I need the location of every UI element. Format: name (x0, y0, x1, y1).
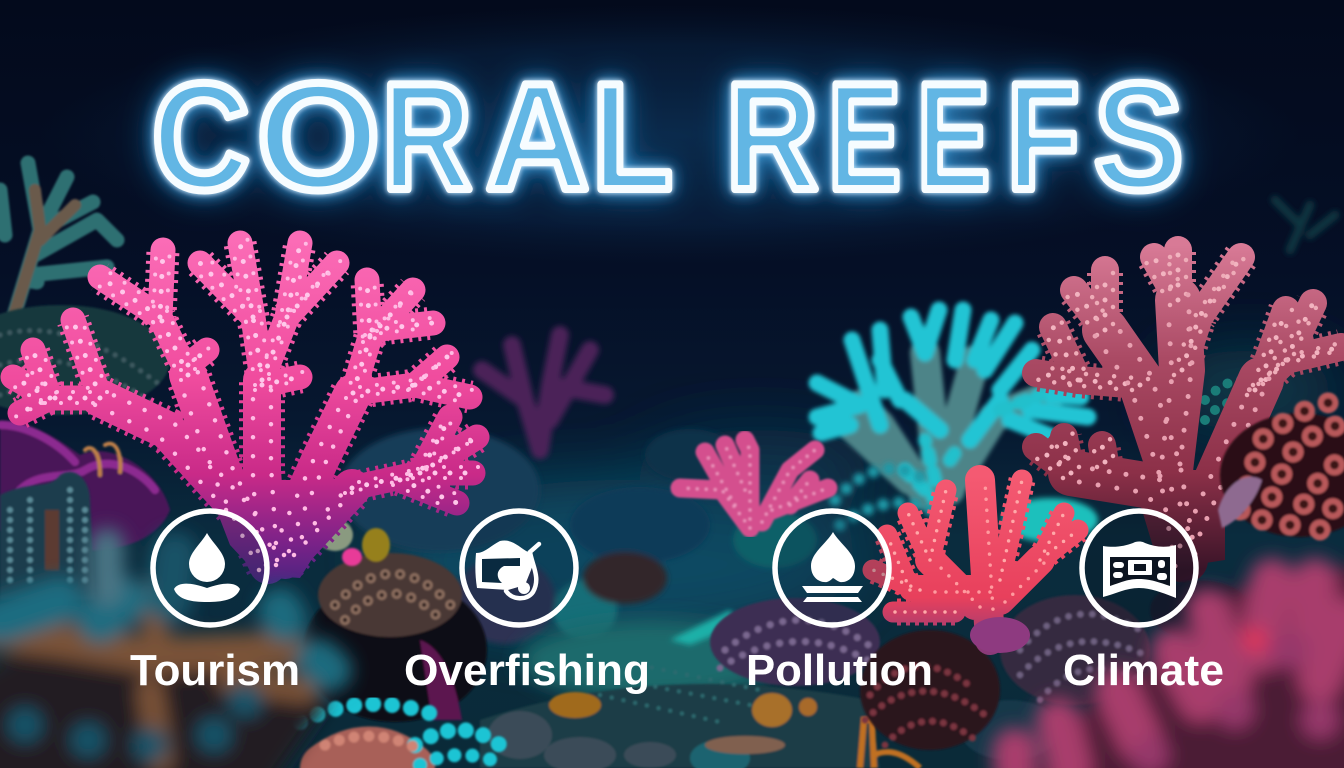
icon: Overfishing (462, 511, 576, 625)
title: CORAL REEFS neon (152, 51, 1183, 222)
coral: small pink middle (680, 440, 828, 528)
bright teal sand (670, 610, 740, 645)
label: Pollution: Pollution (746, 646, 933, 695)
reef: teal cluster behind salmon coral (1205, 380, 1260, 420)
reef: purple left (0, 420, 170, 550)
coral: blurred foreground left (0, 545, 330, 768)
title: CORAL REEFS neon: C (152, 53, 250, 222)
title: CORAL REEFS neon: E (828, 52, 901, 222)
seabed: pebbles (480, 665, 920, 768)
background: title water glow (40, 5, 1300, 265)
label: Climate: Climate (1063, 646, 1224, 695)
title: CORAL REEFS neon: E (917, 52, 990, 222)
coral: blurred foreground right (1015, 560, 1344, 768)
coral: cyan centre right (817, 310, 1088, 500)
label: Overfishing: Overfishing (404, 646, 650, 695)
icon: Pollution (775, 511, 889, 625)
coral: cyan and salmon lower centre (300, 704, 505, 768)
title: CORAL REEFS neon: R (382, 52, 472, 222)
teal patch behind salmon coral (1002, 498, 1098, 542)
coral: cyan lower cluster (835, 469, 930, 525)
reef: dark red rock (860, 630, 1000, 750)
coral: red foreground (873, 480, 1078, 653)
coral: faint top-right shadow (1275, 200, 1335, 250)
reef: purple mound centre (710, 598, 880, 686)
coral: large pink left (6, 237, 484, 578)
coral: salmon large right (1028, 244, 1344, 570)
reef: blue-grey coral left (0, 472, 95, 600)
icon: Climate (1082, 511, 1196, 625)
title: CORAL REEFS neon: A (486, 52, 589, 222)
reef: small colourful polyps (317, 519, 390, 566)
reef: grey-purple right mound (960, 580, 1250, 760)
title: CORAL REEFS neon: F (1007, 52, 1079, 221)
labels (130, 646, 1224, 695)
teal seabed glow (520, 620, 780, 700)
title: CORAL REEFS neon: O (257, 52, 380, 221)
icon: Tourism (153, 511, 267, 625)
reef: brown bubbly rock (303, 553, 487, 722)
title: CORAL REEFS neon: S (1094, 52, 1183, 222)
title: CORAL REEFS neon: R (726, 51, 818, 221)
distant coral mounds (340, 428, 817, 644)
reef: left dark textured mound (0, 305, 170, 420)
coral: dim purple background (482, 335, 605, 450)
title: CORAL REEFS neon: L (592, 52, 673, 222)
background: distant haze (380, 350, 1340, 640)
coral: teal upper left (0, 163, 117, 312)
reef: red bubbly far right (1218, 400, 1344, 537)
label: Tourism: Tourism (130, 646, 300, 695)
